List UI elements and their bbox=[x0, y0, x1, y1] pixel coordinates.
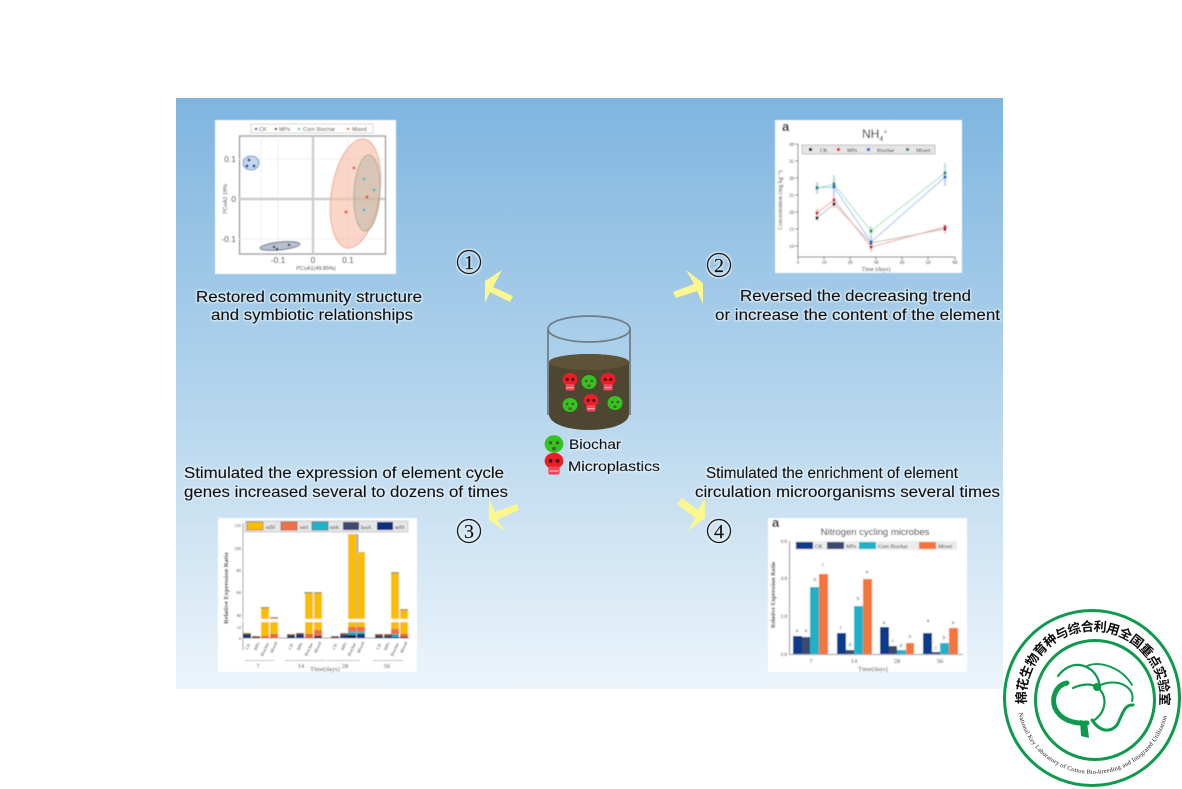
panel: NH4+ line chart bbox=[775, 119, 962, 273]
legend: nirS bbox=[300, 526, 309, 531]
chart title: + bbox=[883, 129, 887, 136]
x axis labels bbox=[244, 640, 409, 673]
caption: restored community structure: Restored community structure bbox=[196, 289, 422, 306]
number 2: 2 bbox=[714, 255, 724, 277]
ellipse: CK group bbox=[243, 156, 259, 170]
background panel bbox=[176, 98, 1003, 689]
legend: Corn Biochar bbox=[878, 544, 908, 550]
number 3 bbox=[458, 520, 480, 543]
legend: biochar: Biochar bbox=[569, 436, 621, 452]
plot frame and grid bbox=[239, 136, 386, 254]
legend: biochar bbox=[545, 435, 621, 453]
chart title: 4 bbox=[879, 136, 883, 143]
axis labels: 40 bbox=[789, 143, 794, 148]
data markers bbox=[816, 172, 946, 248]
caption: reversed decreasing trend: Reversed the decreasing trend bbox=[740, 288, 971, 305]
axis labels: 60 bbox=[952, 261, 958, 266]
ellipse: MPs group bbox=[260, 240, 300, 252]
number 1 bbox=[458, 250, 480, 274]
panel letter: a bbox=[772, 515, 780, 530]
icon: beaker with soil and particles bbox=[548, 316, 630, 430]
seal Chinese text: 棉花生物育种与综合利用全国重点实验室 bbox=[1014, 620, 1172, 705]
axis labels: Time(days) bbox=[858, 666, 888, 673]
axis labels: 50 bbox=[926, 261, 931, 266]
significance letters: b bbox=[943, 635, 946, 641]
axis labels: Time (days) bbox=[862, 266, 890, 273]
number 1: 1 bbox=[464, 252, 474, 274]
axis labels: 35 bbox=[789, 160, 794, 165]
x axis labels: 28 bbox=[342, 663, 348, 670]
caption: stimulated microorganism enrichment: circulation microorganisms several times bbox=[695, 484, 1000, 501]
axis labels: 10 bbox=[789, 245, 794, 250]
particles bbox=[562, 373, 622, 412]
significance letters: c bbox=[822, 562, 825, 568]
axis labels: 40 bbox=[900, 261, 905, 266]
data points bbox=[246, 159, 376, 250]
x axis labels: Mixed bbox=[269, 640, 279, 654]
x axis labels: Biochar bbox=[303, 641, 314, 657]
significance letters: a bbox=[952, 620, 955, 626]
x axis labels: MPs bbox=[296, 641, 304, 651]
axes bbox=[790, 541, 963, 654]
axis labels: 0 bbox=[797, 261, 800, 266]
y axis labels bbox=[223, 523, 242, 641]
axis labels: -0.1 bbox=[221, 234, 236, 244]
legend: Biochar bbox=[877, 148, 895, 154]
axis labels bbox=[221, 154, 354, 272]
caption: stimulated gene expression: Stimulated the expression of element cycle bbox=[184, 465, 504, 482]
arrow to community structure bbox=[485, 270, 513, 303]
soil bbox=[549, 354, 629, 430]
x axis labels: CK bbox=[331, 642, 339, 650]
chart title: NH bbox=[862, 127, 879, 141]
significance letters: c bbox=[892, 638, 895, 644]
legend: CK bbox=[820, 148, 828, 154]
short stacked bars bbox=[243, 633, 392, 638]
panel: nitrogen cycling microbes bar chart bbox=[768, 515, 967, 673]
axis labels: 7 bbox=[809, 658, 813, 665]
seal: laboratory stamp bbox=[1003, 609, 1181, 787]
significance letters: a bbox=[927, 618, 930, 624]
significance letters: a bbox=[866, 569, 869, 575]
significance letters: d bbox=[900, 643, 903, 649]
legend: CK bbox=[259, 127, 267, 133]
x axis labels: Mixed bbox=[356, 640, 366, 654]
x axis labels: 14 bbox=[298, 663, 305, 670]
x axis labels: CK bbox=[375, 642, 383, 650]
caption: stimulated gene expression: genes increased several to dozens of times bbox=[184, 484, 508, 501]
axis labels: 2.0 bbox=[781, 615, 788, 620]
axis labels: 0 bbox=[231, 194, 236, 204]
x axis labels: MPs bbox=[340, 641, 348, 651]
y axis labels: 0 bbox=[239, 636, 242, 641]
glass outline bbox=[548, 316, 630, 415]
x axis labels: Time(days) bbox=[310, 666, 340, 673]
number 4: 4 bbox=[714, 521, 724, 543]
significance letters bbox=[796, 562, 955, 651]
x axis labels: MPs bbox=[253, 641, 261, 651]
x axis labels: 56 bbox=[384, 663, 391, 670]
legend: Mixed bbox=[938, 544, 953, 550]
x axis labels: Biochar bbox=[389, 641, 400, 657]
seal English text: National Key Laboratory of Cotton Bio-breeding and Integrated Utilization bbox=[1018, 712, 1167, 774]
cotton logo centre and stem bbox=[1080, 683, 1101, 738]
axis labels: 30 bbox=[874, 261, 879, 266]
legend bbox=[795, 541, 957, 550]
y axis labels: 120 bbox=[234, 523, 242, 528]
axes bbox=[243, 523, 410, 650]
axis labels: 56 bbox=[937, 658, 944, 665]
legend: hzsA bbox=[361, 526, 372, 531]
significance letters: c bbox=[935, 645, 938, 651]
legend: Mixed bbox=[352, 127, 367, 133]
legend: MPs bbox=[279, 127, 290, 133]
significance letters: a bbox=[805, 628, 808, 634]
caption: reversed decreasing trend: or increase the content of the element bbox=[715, 307, 1001, 324]
axis labels: 0.0 bbox=[781, 653, 788, 658]
x axis labels: CK bbox=[287, 642, 295, 650]
x axis labels: Mixed bbox=[313, 640, 323, 654]
panel letter: a bbox=[782, 119, 790, 134]
axis labels: 30 bbox=[789, 177, 794, 182]
seal rings bbox=[1004, 610, 1180, 786]
axis labels: Relative Expression Ratio bbox=[771, 562, 777, 628]
axis labels: 0.1 bbox=[224, 154, 236, 164]
axes bbox=[795, 144, 955, 260]
legend: microplastics bbox=[545, 453, 660, 475]
arrow to gene expression bbox=[489, 498, 519, 532]
y axis labels: 100 bbox=[234, 546, 242, 551]
chart title: Nitrogen cycling microbes bbox=[821, 527, 930, 538]
x axis labels: Mixed bbox=[399, 640, 409, 654]
y axis labels: 80 bbox=[236, 568, 242, 573]
legend: nifH bbox=[266, 526, 276, 531]
axis labels: 20 bbox=[789, 211, 794, 216]
axis labels bbox=[771, 540, 944, 673]
x axis labels: Biochar bbox=[259, 641, 270, 657]
significance letters: c bbox=[840, 625, 843, 631]
x axis labels: Biochar bbox=[346, 641, 357, 657]
legend: Corn Biochar bbox=[303, 127, 335, 133]
legend: MPs bbox=[846, 544, 856, 550]
caption: stimulated microorganism enrichment: Stimulated the enrichment of element bbox=[706, 465, 959, 482]
legend: MPs bbox=[847, 148, 857, 154]
legend: nirK bbox=[330, 526, 340, 531]
axis labels: 0 bbox=[311, 255, 316, 265]
axis labels: PCoA2 19% bbox=[223, 184, 229, 214]
legend: CK bbox=[815, 544, 823, 550]
axis labels: -0.1 bbox=[271, 255, 286, 265]
axis break band bbox=[243, 619, 411, 622]
axis labels: 4.0 bbox=[781, 577, 788, 582]
legend: nrfH bbox=[395, 526, 405, 531]
axis labels: Concentration (mg kg⁻¹) bbox=[777, 170, 784, 230]
ellipse: mixed group bbox=[323, 135, 388, 252]
y axis labels: 40 bbox=[236, 613, 242, 618]
legend: microplastics: Microplastics bbox=[568, 458, 660, 474]
axis labels: 14 bbox=[851, 658, 858, 665]
panel: gene expression stacked bar chart bbox=[218, 518, 417, 673]
y axis labels: 10 bbox=[236, 625, 242, 630]
panel: community structure PCoA chart bbox=[215, 120, 396, 274]
line series bbox=[817, 173, 945, 247]
axis labels: 20 bbox=[848, 261, 853, 266]
significance letters: b bbox=[814, 577, 817, 583]
axis labels: 0.1 bbox=[342, 255, 354, 265]
number 4 bbox=[708, 520, 730, 543]
legend: Mixed bbox=[916, 148, 931, 154]
legend bbox=[251, 124, 373, 133]
error bars bbox=[817, 163, 945, 252]
legend bbox=[245, 521, 408, 532]
axis labels: 15 bbox=[789, 228, 794, 233]
bars bbox=[793, 574, 958, 654]
cotton logo bbox=[1054, 664, 1133, 730]
axis labels: 25 bbox=[789, 194, 794, 199]
significance letters: a bbox=[796, 628, 799, 634]
axis labels: 28 bbox=[894, 658, 900, 665]
axis labels: PCoA1(49.85%) bbox=[296, 266, 336, 272]
legend bbox=[802, 145, 935, 154]
number 2 bbox=[708, 254, 730, 277]
ellipse: biochar group bbox=[352, 154, 382, 232]
number 3: 3 bbox=[464, 521, 474, 543]
caption: restored community structure: and symbiotic relationships bbox=[211, 307, 413, 324]
axis labels: 10 bbox=[822, 261, 827, 266]
tall stacked bars bbox=[260, 534, 408, 638]
axis labels: 6.0 bbox=[781, 540, 788, 545]
x axis labels: CK bbox=[244, 642, 252, 650]
significance letters: a bbox=[883, 620, 886, 626]
axis labels bbox=[777, 143, 958, 273]
arrow to microorganisms bbox=[677, 498, 705, 531]
x axis labels: MPs bbox=[383, 641, 391, 651]
y axis labels: Relative Expression Ratio bbox=[223, 552, 230, 624]
significance letters: d bbox=[849, 642, 852, 648]
significance letters: b bbox=[909, 634, 912, 640]
y axis labels: 60 bbox=[236, 590, 242, 595]
x axis labels: 7 bbox=[256, 663, 260, 670]
significance letters: b bbox=[857, 596, 860, 602]
arrow to element content bbox=[673, 270, 703, 304]
